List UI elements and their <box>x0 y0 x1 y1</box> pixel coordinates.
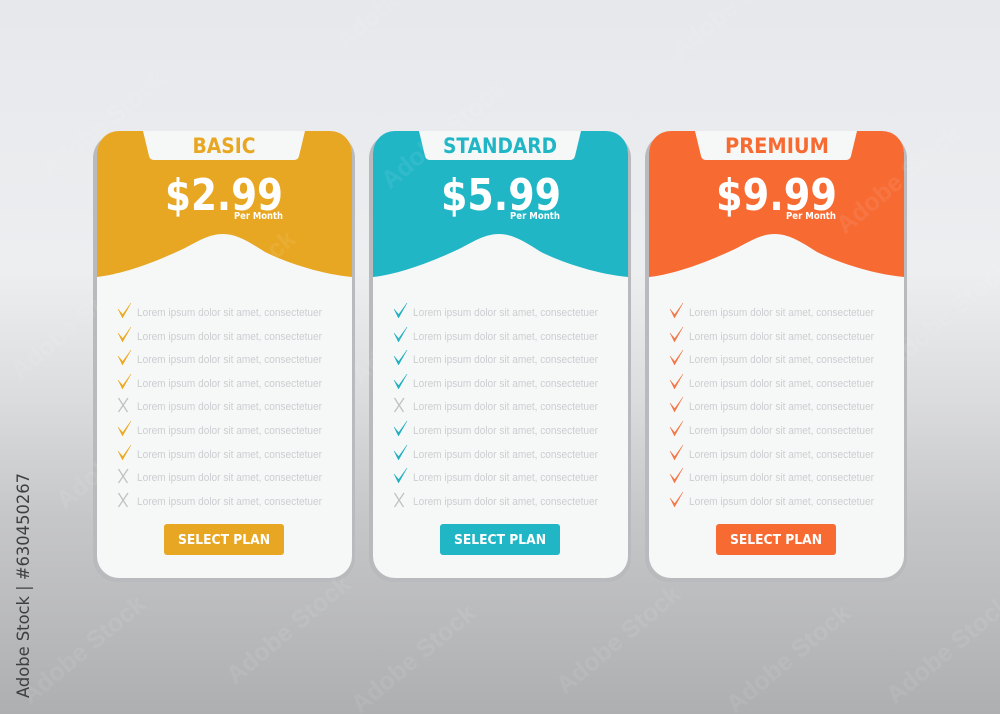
watermarks: Adobe Stock <box>221 570 356 690</box>
button: select plan: SELECT PLAN <box>730 532 822 548</box>
card shadow <box>645 134 907 582</box>
watermarks: Adobe Stock <box>716 410 851 530</box>
per month label: Per Month <box>234 211 283 222</box>
heading: standard: STANDARD <box>443 134 557 158</box>
watermarks: Adobe Stock <box>381 410 516 530</box>
feature list: Lorem ipsum dolor sit amet, consectetuer <box>137 496 322 508</box>
coloured header with wave <box>373 131 628 277</box>
button: select plan <box>440 524 560 555</box>
coloured header with wave <box>649 131 904 277</box>
watermarks: Adobe Stock <box>376 75 511 195</box>
feature list: Lorem ipsum dolor sit amet, consectetuer <box>689 425 874 437</box>
panel: basic plan <box>93 131 355 582</box>
watermarks: Adobe Stock <box>166 225 301 345</box>
feature list: Lorem ipsum dolor sit amet, consectetuer <box>137 401 322 413</box>
feature list <box>118 303 322 508</box>
feature list: Lorem ipsum dolor sit amet, consectetuer <box>689 378 874 390</box>
feature list: Lorem ipsum dolor sit amet, consectetuer <box>413 496 598 508</box>
feature list: Lorem ipsum dolor sit amet, consectetuer <box>137 449 322 461</box>
panel: standard plan <box>369 131 631 582</box>
feature list: Lorem ipsum dolor sit amet, consectetuer <box>137 354 322 366</box>
card body <box>373 131 628 578</box>
card body <box>649 131 904 578</box>
watermarks: Adobe Stock <box>51 395 186 515</box>
watermarks: Adobe Stock <box>16 590 151 710</box>
feature list: Lorem ipsum dolor sit amet, consectetuer <box>689 331 874 343</box>
card shadow <box>369 134 631 582</box>
feature list: Lorem ipsum dolor sit amet, consectetuer <box>413 472 598 484</box>
button: select plan <box>164 524 284 555</box>
button: select plan <box>716 524 836 555</box>
feature list: Lorem ipsum dolor sit amet, consectetuer <box>413 307 598 319</box>
feature list: Lorem ipsum dolor sit amet, consectetuer <box>689 449 874 461</box>
heading: premium: PREMIUM <box>725 134 829 158</box>
feature list: Lorem ipsum dolor sit amet, consectetuer <box>413 449 598 461</box>
heading: basic: BASIC <box>192 134 256 158</box>
feature list <box>670 303 874 508</box>
feature list: Lorem ipsum dolor sit amet, consectetuer <box>413 425 598 437</box>
coloured header with wave <box>97 131 352 277</box>
card body <box>97 131 352 578</box>
feature list: Lorem ipsum dolor sit amet, consectetuer <box>137 307 322 319</box>
feature list <box>394 303 598 508</box>
title tab <box>143 131 305 160</box>
title tab <box>695 131 857 160</box>
title tab <box>419 131 581 160</box>
per month label: Per Month <box>786 211 836 222</box>
button: select plan: SELECT PLAN <box>454 532 546 548</box>
per month label: Per Month <box>510 211 560 222</box>
price: $9.99 <box>716 170 837 221</box>
feature list: Lorem ipsum dolor sit amet, consectetuer <box>137 378 322 390</box>
price: $2.99 <box>165 170 283 221</box>
feature list: Lorem ipsum dolor sit amet, consectetuer <box>689 307 874 319</box>
price: $5.99 <box>441 170 561 221</box>
feature list: Lorem ipsum dolor sit amet, consectetuer <box>689 354 874 366</box>
watermarks: Adobe Stock <box>551 580 686 700</box>
watermarks: Adobe Stock <box>666 295 801 415</box>
watermarks: Adobe Stock <box>36 65 171 185</box>
feature list: Lorem ipsum dolor sit amet, consectetuer <box>137 425 322 437</box>
stock id label: Adobe Stock | #630450267 <box>14 473 34 698</box>
feature list: Lorem ipsum dolor sit amet, consectetuer <box>137 331 322 343</box>
card shadow <box>93 134 355 582</box>
feature list: Lorem ipsum dolor sit amet, consectetuer <box>689 472 874 484</box>
button: select plan: SELECT PLAN <box>178 532 270 548</box>
watermarks: Adobe Stock <box>346 270 481 390</box>
feature list: Lorem ipsum dolor sit amet, consectetuer <box>413 354 598 366</box>
watermarks: Adobe Stock <box>6 265 141 385</box>
feature list: Lorem ipsum dolor sit amet, consectetuer <box>137 472 322 484</box>
watermarks: Adobe Stock <box>831 120 966 240</box>
feature list: Lorem ipsum dolor sit amet, consectetuer <box>413 331 598 343</box>
feature list: Lorem ipsum dolor sit amet, consectetuer <box>413 378 598 390</box>
feature list: Lorem ipsum dolor sit amet, consectetuer <box>413 401 598 413</box>
feature list: Lorem ipsum dolor sit amet, consectetuer <box>689 401 874 413</box>
panel: premium plan <box>645 131 907 582</box>
feature list: Lorem ipsum dolor sit amet, consectetuer <box>689 496 874 508</box>
